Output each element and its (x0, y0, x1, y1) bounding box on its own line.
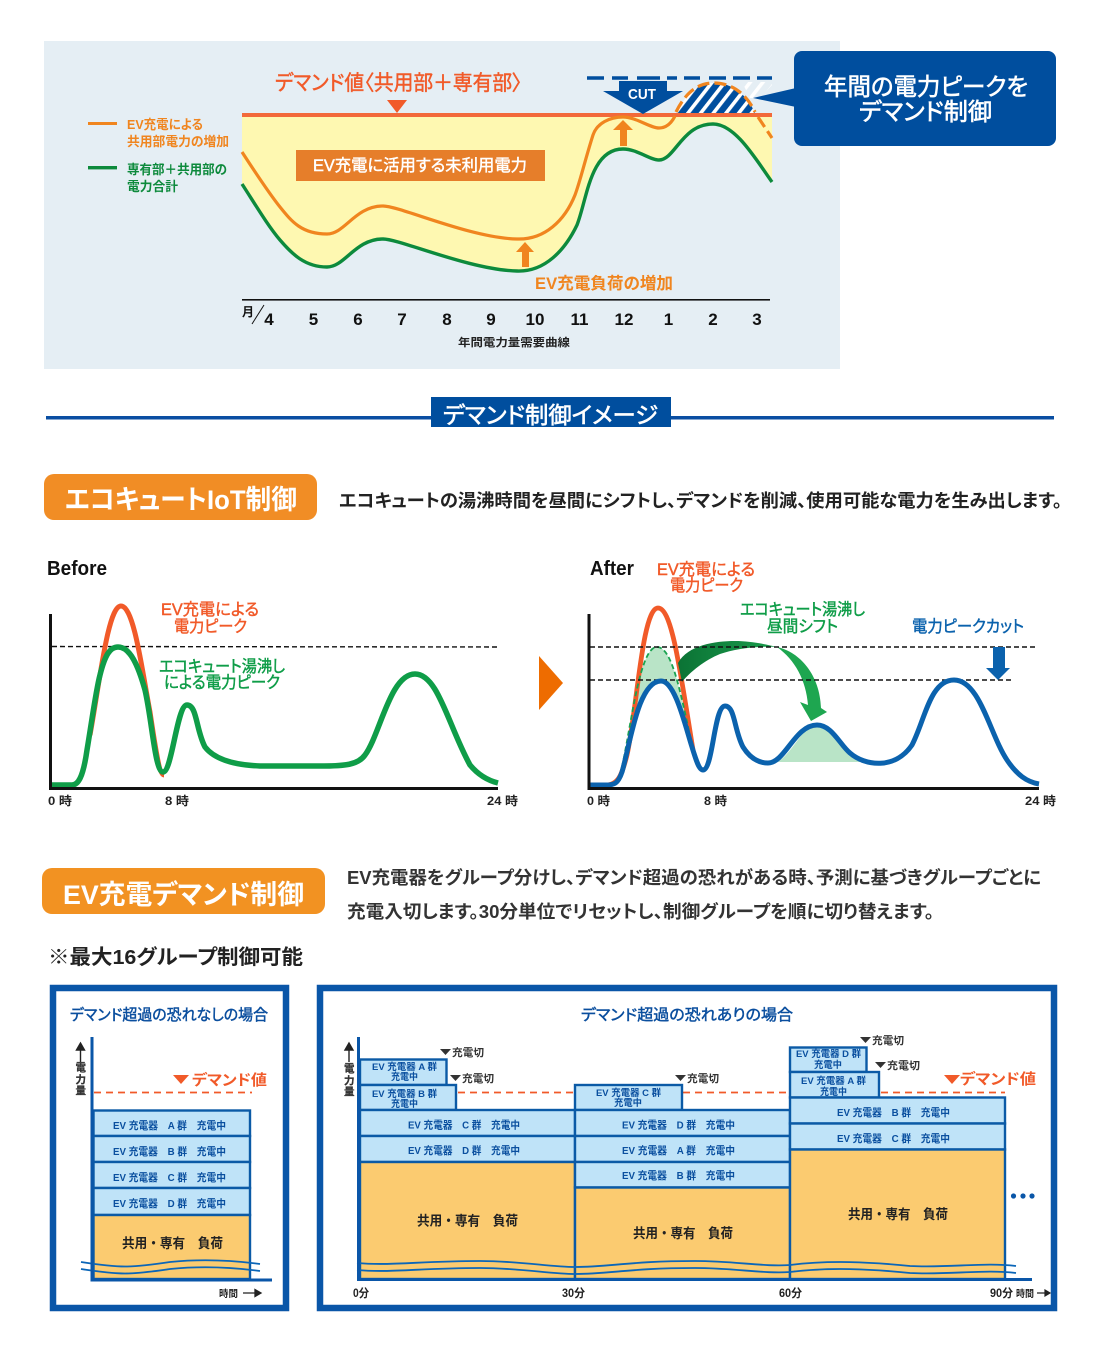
legend: EV充電による (127, 117, 203, 132)
chart: after: エコキュート湯沸し (740, 600, 865, 619)
y axis label: 量 (344, 1086, 355, 1098)
chart: after: After (590, 558, 634, 580)
curve: green (242, 124, 772, 271)
column: 0 to 30 min: 充電中 (391, 1071, 418, 1083)
arrow: cut (603, 81, 683, 114)
time labels: 60分 (779, 1286, 802, 1300)
demand dashed line (587, 76, 772, 80)
column: 30 to 60 min: 共用・専有 負荷 (633, 1225, 733, 1241)
column: 30 to 60 min: EV 充電器 A 群 充電中 (622, 1144, 735, 1157)
panel: risk of exceeding demand: デマンド超過の恐れありの場合 (581, 1005, 794, 1024)
column: 30 to 60 min: EV 充電器 C 群 (596, 1087, 661, 1099)
time label: 時間 (219, 1288, 238, 1300)
arrow: cut: CUT (628, 86, 656, 103)
charge-off markers: 充電切 (872, 1034, 904, 1047)
column: 60 to 90 min: EV 充電器 D 群 (796, 1048, 861, 1060)
x axis: months: 12 (615, 310, 633, 329)
panel: no risk of exceeding demand: デマンド超過の恐れなしの場合 (70, 1005, 268, 1024)
stacked blocks: EV 充電器 C 群 充電中 (113, 1171, 226, 1184)
stacked blocks: EV 充電器 B 群 充電中 (113, 1145, 226, 1158)
demand marker: デマンド値 (192, 1071, 267, 1089)
charge-off markers: 充電切 (887, 1059, 920, 1072)
chart: after (587, 558, 1056, 808)
chart: after: 8 時 (704, 793, 727, 808)
column: 0 to 30 min (360, 1060, 575, 1279)
x axis: months: 5 (309, 310, 318, 329)
x axis: months: 4 (264, 310, 274, 329)
chart: before: による電力ピーク (164, 673, 280, 692)
charge-off markers: 充電切 (687, 1072, 719, 1085)
badge: EcoCute IoT control: エコキュートIoT制御 (65, 485, 297, 515)
y axis label (76, 1043, 86, 1097)
chart: after: 0 時 (587, 793, 610, 808)
x axis: months: 7 (397, 310, 407, 329)
axes (589, 614, 1039, 788)
stacked blocks: 共用・専有 負荷 (122, 1235, 223, 1251)
column: 60 to 90 min: 充電中 (820, 1086, 847, 1098)
demand line (242, 113, 772, 117)
charge-off markers: 充電切 (462, 1072, 494, 1085)
column: 60 to 90 min: EV 充電器 A 群 (801, 1075, 866, 1087)
unused power area (242, 115, 772, 271)
y axis label: 力 (76, 1073, 86, 1086)
stacked blocks (94, 1110, 250, 1279)
x axis: months: 3 (752, 310, 762, 329)
legend: 共用部電力の増加 (127, 134, 229, 149)
time labels: 90分 (990, 1286, 1013, 1300)
dome: cut peak (677, 83, 755, 113)
stacked blocks: EV 充電器 A 群 充電中 (113, 1119, 226, 1132)
charge-off markers (440, 1034, 920, 1085)
label: EV load increase: EV充電負荷の増加 (535, 273, 673, 293)
callout label box (296, 150, 545, 181)
curve: green dashed (622, 647, 692, 767)
stacked blocks: EV 充電器 D 群 充電中 (113, 1197, 226, 1210)
curve: load after (590, 680, 1039, 785)
chart: after: 電力ピークカット (912, 617, 1024, 636)
column: 30 to 60 min: EV 充電器 D 群 充電中 (622, 1118, 735, 1132)
arrow: load increase bottom (516, 242, 534, 267)
description: EcoCute: エコキュートの湯沸時間を昼間にシフトし、デマンドを削減、使用可能な電力を生み出します。 (339, 490, 1062, 511)
x axis: months: 10 (526, 310, 544, 329)
badge: EV charging demand control: EV充電デマンド制御 (63, 879, 304, 910)
y axis label: 電 (76, 1062, 86, 1074)
x axis: months: 1 (664, 310, 673, 329)
y axis label (344, 1043, 355, 1098)
description: EV charging: EV充電器をグループ分けし、デマンド超過の恐れがある時、予測に基づきグループごとに (347, 867, 1041, 888)
column: 0 to 30 min: 充電中 (391, 1098, 418, 1110)
time labels: 0分 (353, 1286, 369, 1300)
column: 60 to 90 min: EV 充電器 C 群 充電中 (837, 1132, 950, 1145)
legend: 電力合計 (127, 179, 178, 194)
break waves (81, 1260, 260, 1274)
column: 30 to 60 min: 充電中 (614, 1097, 642, 1109)
chart: before: Before (47, 558, 107, 580)
column: 60 to 90 min: 充電中 (814, 1059, 842, 1071)
demand marker (94, 1071, 267, 1092)
x axis: months (242, 299, 770, 349)
axes (92, 1037, 272, 1280)
axes (358, 1037, 1032, 1280)
column: 0 to 30 min: EV 充電器 D 群 充電中 (408, 1144, 520, 1157)
curve: EV peak (90, 606, 164, 775)
arrow: peak cut (986, 647, 1010, 680)
arrow: load increase top (613, 120, 633, 146)
continuation dots (1011, 1193, 1035, 1199)
panel: no risk of exceeding demand (53, 988, 286, 1308)
chart: before: エコキュート湯沸し (159, 657, 285, 676)
time labels: 時間 (1016, 1288, 1034, 1300)
axes (50, 614, 498, 788)
description: EV charging: 充電入切します。30分単位でリセットし、制御グループを順に切り替えます。 (347, 901, 934, 922)
x axis: months: 2 (708, 310, 718, 329)
demand marker: デマンド値 (960, 1070, 1036, 1088)
y axis label: 力 (344, 1074, 354, 1087)
curve: EV peak (606, 608, 693, 785)
chart: after: 電力ピーク (670, 576, 743, 595)
column: 0 to 30 min: EV 充電器 A 群 (372, 1061, 437, 1073)
x axis: months: 6 (353, 310, 363, 329)
charge-off markers: 充電切 (452, 1046, 484, 1059)
y axis label: 量 (76, 1085, 86, 1097)
chart: before: 8 時 (165, 793, 189, 808)
shifted area: added (778, 725, 864, 762)
y axis label: 電 (344, 1063, 355, 1075)
arrow: time shift (678, 641, 827, 721)
time labels (353, 1286, 1050, 1300)
chart: before: 24 時 (487, 793, 518, 808)
x axis: months: 11 (571, 310, 588, 329)
callout: annual peak control: デマンド制御 (859, 99, 992, 126)
badge: EcoCute IoT control (44, 474, 317, 520)
chart: after: 24 時 (1025, 793, 1056, 808)
column: 0 to 30 min: EV 充電器 B 群 (372, 1088, 437, 1100)
faded hatch (742, 82, 772, 98)
chart: after: EV充電による (657, 560, 755, 579)
time labels: 30分 (562, 1286, 585, 1300)
chart: before: 電力ピーク (174, 617, 247, 636)
break waves (357, 1261, 1016, 1274)
column: 60 to 90 min: EV 充電器 B 群 充電中 (837, 1106, 950, 1119)
badge: EV charging demand control (42, 868, 325, 914)
panel: risk of exceeding demand (320, 988, 1054, 1308)
heading: demand value: デマンド値〈共用部＋専有部〉 (275, 72, 522, 95)
time label (219, 1288, 261, 1300)
x axis: months: 8 (442, 310, 452, 329)
demand dashed line (458, 1092, 1005, 1094)
chart: after: 昼間シフト (767, 618, 838, 636)
column: 60 to 90 min (790, 1048, 1005, 1279)
description: EV charging (347, 867, 1041, 922)
x axis: months: 月 (242, 305, 254, 319)
callout label box: EV充電に活用する未利用電力 (313, 156, 527, 175)
chart: before: 0 時 (48, 793, 72, 808)
curve: orange (242, 116, 675, 239)
chart: before: EV充電による (161, 600, 259, 619)
chart: before (47, 558, 518, 808)
panel: annual demand curve (44, 41, 840, 369)
arrow: before to after (539, 656, 563, 710)
callout: annual peak control: 年間の電力ピークを (824, 74, 1028, 101)
column: 0 to 30 min: 共用・専有 負荷 (417, 1212, 518, 1228)
column: 60 to 90 min: 共用・専有 負荷 (848, 1206, 948, 1222)
curve: orange dashed peak (676, 83, 772, 138)
x axis: months: 年間電力量需要曲線 (458, 335, 570, 349)
section heading: demand control image (46, 397, 1054, 428)
column: 30 to 60 min (575, 1085, 790, 1279)
callout: annual peak control (753, 51, 1056, 146)
column: 0 to 30 min: EV 充電器 C 群 充電中 (408, 1118, 520, 1132)
shifted area: removed (622, 647, 692, 767)
curve: load (52, 647, 498, 785)
legend (88, 117, 229, 194)
section heading: demand control image: デマンド制御イメージ (443, 402, 658, 428)
marker: demand triangle (387, 100, 407, 113)
column: 30 to 60 min: EV 充電器 B 群 充電中 (622, 1169, 735, 1182)
x axis: months: 9 (486, 310, 496, 329)
legend: 専有部＋共用部の (127, 162, 227, 177)
note: max 16 groups: ※最大16グループ制御可能 (48, 945, 304, 969)
